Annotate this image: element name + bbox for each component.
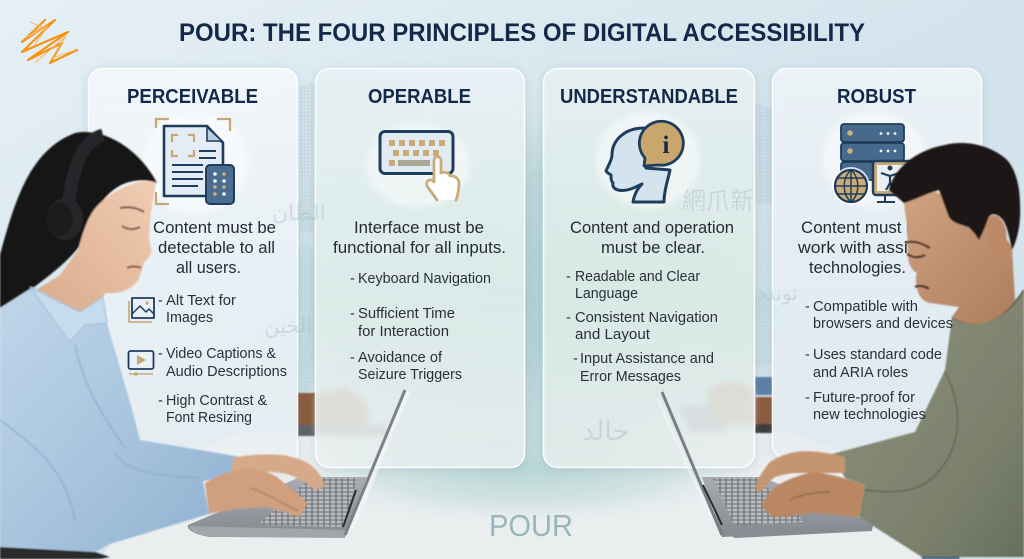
jeans xyxy=(905,480,960,559)
shirt xyxy=(0,287,241,552)
list: robust items: and ARIA roles xyxy=(813,365,908,381)
panel: operable xyxy=(316,68,524,468)
description: perceivable: Content must be xyxy=(153,219,276,237)
list: perceivable items: Font Resizing xyxy=(166,410,252,426)
list: operable items: Avoidance of xyxy=(358,350,443,366)
list: operable items xyxy=(350,271,491,383)
list: robust items: - xyxy=(805,347,810,363)
watermark: foreign script words: توندد xyxy=(757,281,798,305)
list: understandable items: Readable and Clear xyxy=(575,269,700,285)
description: robust: Content must be xyxy=(801,219,925,237)
person: man in green sweater xyxy=(755,143,1024,559)
hair xyxy=(889,143,1020,250)
list: understandable items xyxy=(566,269,718,385)
icon: document with braille panel xyxy=(143,110,247,214)
heading: perceivable: PERCEIVABLE xyxy=(127,86,258,108)
list: perceivable items: Alt Text for xyxy=(166,293,236,309)
list: operable items: - xyxy=(350,350,355,366)
list: operable items: Seizure Triggers xyxy=(358,367,462,383)
list: understandable items: - xyxy=(566,310,571,326)
teal glow xyxy=(275,420,775,540)
heading: understandable: UNDERSTANDABLE xyxy=(560,86,738,108)
list: perceivable items: Audio Descriptions xyxy=(166,364,287,380)
description: perceivable: detectable to all xyxy=(158,239,275,257)
list: perceivable items: Images xyxy=(166,310,213,326)
description: perceivable: all users. xyxy=(176,259,241,277)
list: robust items: new technologies xyxy=(813,407,926,423)
ear xyxy=(988,215,1007,262)
list: perceivable items: - xyxy=(158,293,163,309)
table xyxy=(100,432,940,559)
description: operable xyxy=(333,219,506,257)
pour label: POUR xyxy=(489,508,573,543)
heading: operable: OPERABLE xyxy=(368,86,471,108)
icon: head with info bubble xyxy=(596,112,700,208)
trousers xyxy=(0,547,110,559)
list: operable items: Sufficient Time xyxy=(358,306,455,322)
list: robust items: browsers and devices xyxy=(813,316,953,332)
ghost reflections of hands and laptops xyxy=(297,377,773,436)
title: POUR: THE FOUR PRINCIPLES OF DIGITAL ACCESSIBILITY xyxy=(179,19,865,47)
list: understandable items: - xyxy=(573,351,578,367)
panel: robust xyxy=(772,68,982,458)
watermark: foreign script words xyxy=(264,181,798,447)
description: operable: functional for all inputs. xyxy=(333,239,506,257)
icon: keyboard with pointing hand xyxy=(366,123,470,207)
list: perceivable items: High Contrast & xyxy=(166,393,267,409)
list: operable items: Keyboard Navigation xyxy=(358,271,491,287)
watermark: foreign script words: الخين xyxy=(264,314,312,338)
list: understandable items: Language xyxy=(575,286,638,302)
list: understandable items: - xyxy=(566,269,571,285)
list: understandable items: and Layout xyxy=(575,327,650,343)
laptop: left xyxy=(188,390,408,538)
description: operable: Interface must be xyxy=(354,219,484,237)
list: robust items: Uses standard code xyxy=(813,347,942,363)
list: perceivable items: Video Captions & xyxy=(166,346,276,362)
list: robust items: - xyxy=(805,390,810,406)
list: robust items xyxy=(805,299,953,423)
list: robust items: Compatible with xyxy=(813,299,918,315)
watermark: foreign script words: 網爪新 xyxy=(682,181,754,216)
icon: image xyxy=(129,298,154,322)
world map watermark xyxy=(235,72,860,425)
headphones xyxy=(68,135,103,205)
description: perceivable xyxy=(153,219,276,277)
panel: perceivable xyxy=(88,68,298,468)
list: perceivable items xyxy=(158,293,287,426)
face and neck xyxy=(33,181,156,320)
face and neck xyxy=(889,190,1015,324)
list: robust items: Future-proof for xyxy=(813,390,915,406)
hair xyxy=(0,132,157,308)
description: robust: work with assistive xyxy=(797,239,944,257)
list: understandable items: Consistent Navigation xyxy=(575,310,718,326)
list: operable items: for Interaction xyxy=(358,324,449,340)
sweater xyxy=(832,290,1024,557)
icon: video xyxy=(128,351,154,376)
description: understandable: must be clear. xyxy=(601,239,705,257)
icon: server globe and monitor xyxy=(823,112,927,208)
watermark: foreign script words: الظان xyxy=(272,201,326,226)
list: understandable items: Error Messages xyxy=(580,369,681,385)
pale ghost hands behind the glass xyxy=(316,382,754,436)
list: operable items: - xyxy=(350,271,355,287)
hands xyxy=(755,451,845,493)
list: perceivable items: - xyxy=(158,393,163,409)
description: understandable: Content and operation xyxy=(570,219,734,237)
description: understandable xyxy=(570,219,734,257)
logo scribble xyxy=(22,20,77,63)
list: operable items: - xyxy=(350,306,355,322)
list: perceivable items: - xyxy=(158,346,163,362)
description: robust xyxy=(797,219,944,277)
person: woman with headphones xyxy=(0,132,325,559)
heading: robust: ROBUST xyxy=(837,86,916,108)
watermark: foreign script words: خالد xyxy=(582,416,629,447)
list: understandable items: Input Assistance and xyxy=(580,351,714,367)
description: robust: technologies. xyxy=(809,259,906,277)
icon: head with info bubble: i xyxy=(663,132,670,159)
hands xyxy=(230,454,325,490)
panel: understandable xyxy=(544,68,754,468)
list: robust items: - xyxy=(805,299,810,315)
laptop: right xyxy=(657,392,873,538)
